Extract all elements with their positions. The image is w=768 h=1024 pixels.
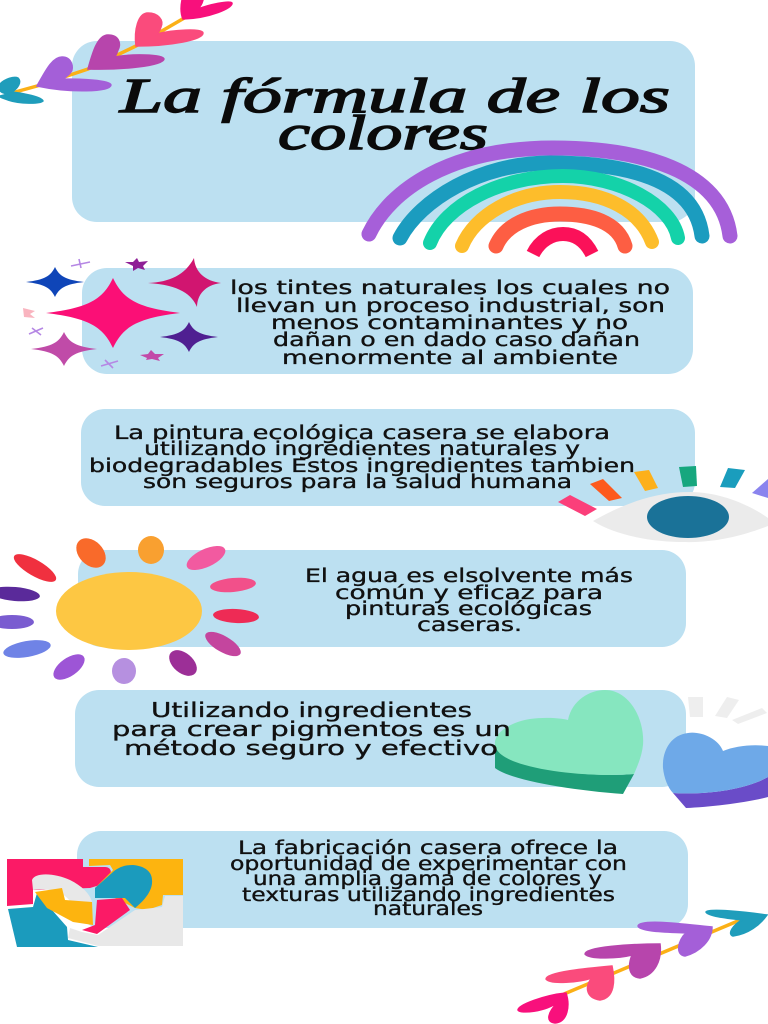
- icon: sun: [0, 532, 259, 685]
- icon: puzzle: [7, 859, 183, 947]
- title: [118, 68, 670, 160]
- text: safe pigments: para crear pigmentos es un: [112, 717, 511, 741]
- text: homemade ecological paint: [89, 423, 635, 493]
- text: safe pigments: método seguro y efectivo: [124, 736, 498, 760]
- text: water as solvent: común y eficaz para: [335, 583, 603, 604]
- icon: sparkles: [23, 258, 221, 368]
- text: home manufacture: texturas utilizando ingredientes: [242, 885, 615, 906]
- title: La fórmula de los: [118, 68, 670, 123]
- panel: safe pigments: [75, 690, 686, 787]
- title: colores: [278, 105, 488, 160]
- panel: natural dyes: [82, 268, 693, 374]
- text: natural dyes: dañan o en dado caso dañan: [273, 330, 640, 351]
- text: home manufacture: [230, 838, 627, 920]
- icon: bottom-right heart branch: [518, 910, 767, 1023]
- text: natural dyes: llevan un proceso industrial, son: [236, 296, 665, 317]
- icon: eye: [558, 466, 768, 542]
- text: water as solvent: El agua es elsolvente más: [305, 566, 633, 587]
- text: safe pigments: [112, 698, 511, 760]
- text: safe pigments: Utilizando ingredientes: [151, 698, 472, 722]
- icon: top-left heart branch: [0, 0, 232, 103]
- text: home manufacture: naturales: [373, 899, 483, 920]
- panel: water as solvent: [78, 550, 686, 647]
- icon: green heart: [495, 690, 643, 794]
- text: natural dyes: menormente al ambiente: [282, 348, 618, 369]
- text: natural dyes: los tintes naturales los cuales no: [230, 278, 670, 299]
- text: home manufacture: La fabricación casera ofrece la: [238, 838, 618, 859]
- text: home manufacture: una amplia gama de colores y: [253, 869, 602, 890]
- panel: homemade ecological paint: [81, 409, 695, 506]
- panel: title background: [72, 41, 695, 222]
- text: homemade ecological paint: biodegradables Estos ingredientes tambien: [89, 456, 635, 477]
- text: natural dyes: [230, 278, 670, 369]
- icon: blue heart with rays: [663, 697, 768, 808]
- text: home manufacture: oportunidad de experimentar con: [230, 854, 627, 875]
- text: water as solvent: [305, 566, 633, 636]
- panel: home manufacture: [77, 831, 688, 928]
- text: homemade ecological paint: utilizando ingredientes naturales y: [144, 439, 580, 460]
- icon: rainbow: [369, 148, 730, 254]
- text: homemade ecological paint: La pintura ecológica casera se elabora: [114, 423, 610, 444]
- text: homemade ecological paint: son seguros para la salud humana: [143, 472, 572, 493]
- text: water as solvent: caseras.: [417, 615, 522, 636]
- text: natural dyes: menos contaminantes y no: [271, 313, 628, 334]
- text: water as solvent: pinturas ecológicas: [345, 599, 592, 620]
